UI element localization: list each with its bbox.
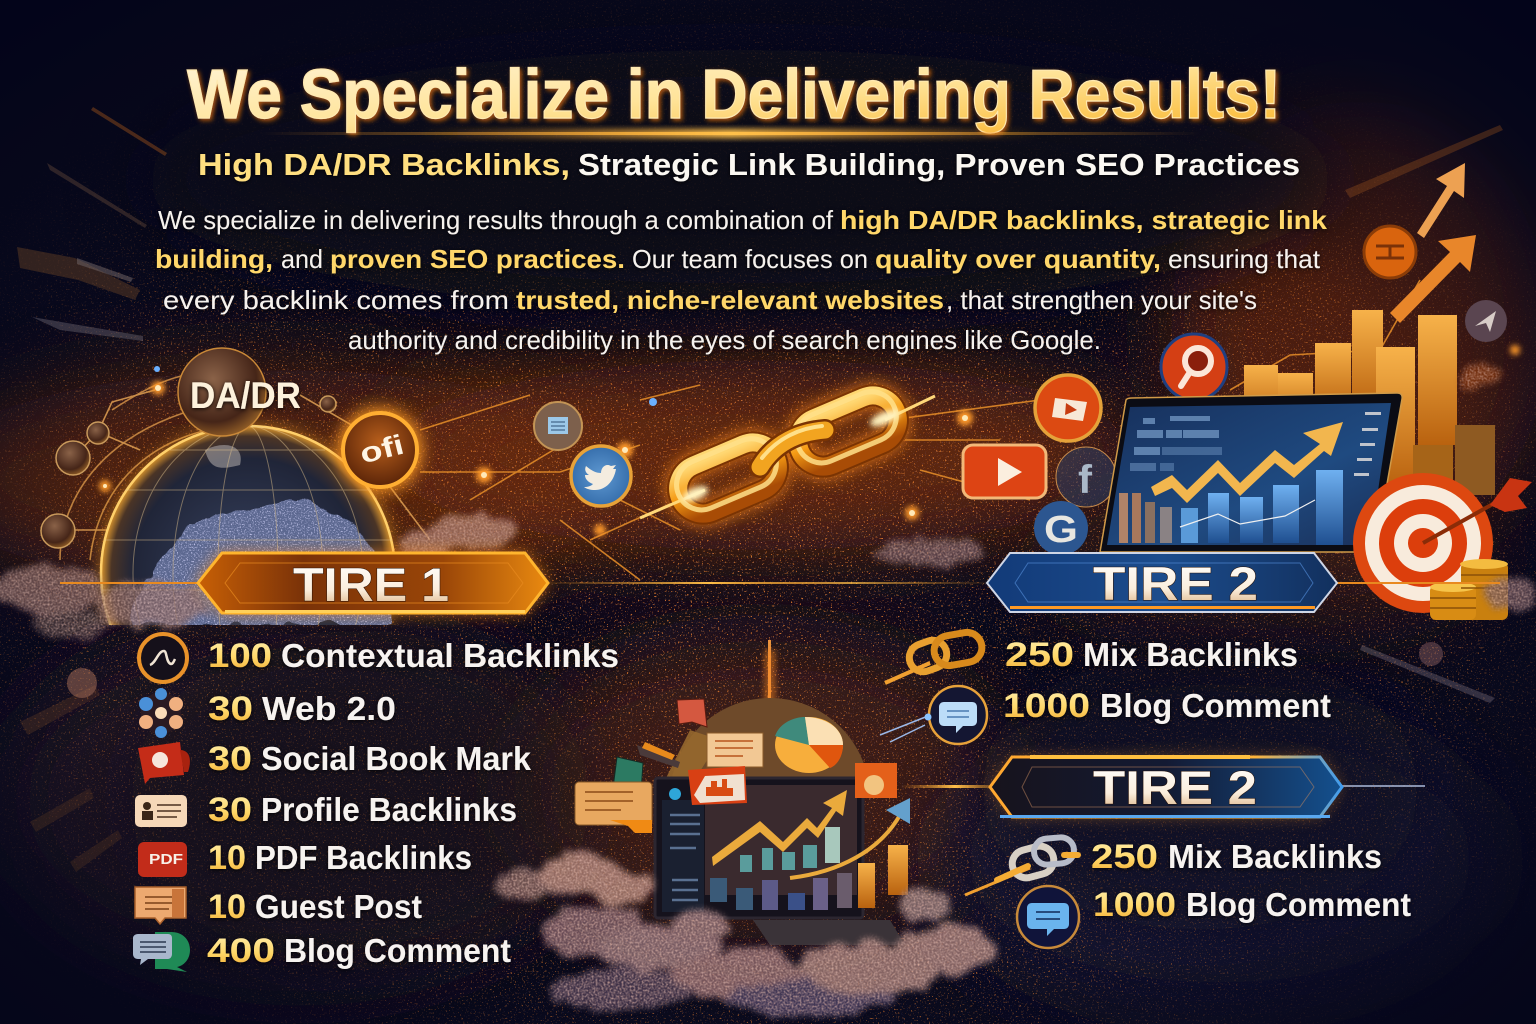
gold rising arrow bbox=[712, 790, 847, 866]
pie chart bbox=[775, 717, 843, 773]
floating doc top bbox=[707, 733, 763, 767]
speech card left bbox=[575, 782, 652, 833]
shards and streaks bbox=[17, 107, 1503, 872]
icon: search badge bbox=[1161, 334, 1227, 400]
description paragraph: trusted, niche-relevant websites bbox=[516, 285, 944, 315]
list: tire 2 lower items: 1000 bbox=[1093, 886, 1176, 924]
list: tire 1 items: Contextual Backlinks bbox=[281, 637, 619, 674]
icon: comment bubbles bbox=[133, 932, 190, 972]
icon: profile card bbox=[135, 795, 187, 827]
subtitle: Strategic Link Building, Proven SEO Practices bbox=[578, 147, 1300, 182]
DA/DR bubble bbox=[178, 348, 301, 436]
subtitle: High DA/DR Backlinks, bbox=[198, 147, 570, 182]
dashboard rising arrow bbox=[1151, 422, 1343, 503]
network lines and sparks bbox=[58, 280, 1420, 580]
list: tire 1 items: 30 bbox=[208, 791, 252, 829]
description paragraph: Our team focuses on bbox=[632, 244, 868, 274]
orange square card bbox=[855, 763, 897, 798]
banner: tire 1: TIRE 1 bbox=[293, 558, 449, 611]
rising arrows with coin badge bbox=[1364, 163, 1507, 342]
icon: facebook bubble bbox=[1056, 447, 1116, 507]
banner: tire 1 bbox=[198, 553, 548, 613]
icon: ofi badge: ofi bbox=[357, 429, 407, 469]
glowing spark nodes bbox=[99, 345, 1520, 632]
banner: tire 2 upper: TIRE 2 bbox=[1093, 557, 1258, 610]
icon: glowing chain bbox=[640, 384, 935, 521]
blue curve arrow bbox=[790, 798, 910, 878]
list: tire 1 items bbox=[207, 637, 619, 970]
laptop screen bbox=[655, 778, 863, 918]
description paragraph: authority and credibility in the eyes of search engines like Google. bbox=[348, 325, 1101, 355]
list: tire 1 items: 30 bbox=[208, 740, 252, 778]
list: tire 2 lower items: Mix Backlinks bbox=[1168, 838, 1382, 875]
list: tire 2 lower items bbox=[1091, 838, 1411, 924]
list: tire 1 items: 30 bbox=[208, 690, 253, 728]
list: tire 1 items: Blog Comment bbox=[284, 932, 511, 969]
icon: comment bubble upper bbox=[880, 686, 987, 744]
title: We Specialize in Delivering Results! bbox=[187, 55, 1281, 133]
green card bbox=[613, 757, 643, 793]
list: tire 1 items: 400 bbox=[207, 932, 275, 970]
clouds behind banners bbox=[0, 363, 1536, 639]
bar chart backdrop bbox=[1244, 310, 1495, 495]
icon: video badge bbox=[1035, 375, 1101, 441]
list: tire 1 items: Web 2.0 bbox=[262, 690, 396, 727]
dashboard text rows bbox=[1130, 416, 1222, 471]
banner rails bbox=[60, 582, 1500, 788]
list: tire 1 items: 100 bbox=[208, 637, 272, 675]
icon: guest post note bbox=[135, 887, 186, 924]
banner: tire 2 lower: TIRE 2 bbox=[1093, 761, 1257, 814]
icon: comment bubble lower bbox=[1017, 886, 1079, 948]
list: tire 1 items: Social Book Mark bbox=[261, 740, 532, 777]
description paragraph bbox=[155, 205, 1328, 355]
icon: bookmark card bbox=[138, 742, 190, 784]
icon: contextual ring bbox=[139, 634, 187, 682]
list: tire 2 upper items: 250 bbox=[1005, 636, 1074, 674]
dashboard laptop scene bbox=[575, 698, 910, 945]
subtitle bbox=[198, 147, 1300, 182]
list: tire 2 upper items: Blog Comment bbox=[1100, 687, 1331, 724]
globe bbox=[89, 416, 402, 625]
dashboard side menu bbox=[1354, 412, 1381, 476]
list: tire 2 upper items: 1000 bbox=[1003, 687, 1090, 725]
icon: web 2.0 hexagons bbox=[139, 688, 183, 738]
list: tire 1 items: Profile Backlinks bbox=[261, 791, 517, 828]
small network bubbles bbox=[41, 396, 336, 548]
keyboard base bbox=[753, 920, 905, 945]
icon: pdf badge: PDF bbox=[149, 851, 183, 868]
red chart card bbox=[688, 766, 747, 805]
banner: tire 2 upper bbox=[987, 553, 1337, 612]
list: tire 1 items: 10 bbox=[208, 839, 246, 877]
list: tire 2 upper items: Mix Backlinks bbox=[1083, 636, 1298, 673]
description paragraph: high DA/DR backlinks, strategic link bbox=[840, 205, 1328, 235]
DA/DR bubble: DA/DR bbox=[190, 375, 301, 416]
list: tire 1 items: 10 bbox=[208, 888, 246, 926]
icon: pdf badge bbox=[138, 842, 187, 877]
teal bars bbox=[740, 827, 840, 872]
banner: tire 2 lower bbox=[990, 755, 1342, 818]
description paragraph: building, bbox=[155, 244, 273, 274]
icon: gold coins bbox=[1430, 559, 1508, 620]
description paragraph: , that strengthen your site's bbox=[946, 285, 1257, 315]
icon: google bubble bbox=[1034, 501, 1088, 555]
description paragraph: We specialize in delivering results through a combination of bbox=[158, 205, 834, 235]
icon: google bubble: G bbox=[1044, 509, 1078, 551]
icon: facebook bubble: f bbox=[1078, 458, 1093, 502]
description paragraph: proven SEO practices. bbox=[330, 244, 625, 274]
list: tire 2 lower items: 250 bbox=[1091, 838, 1158, 876]
central light beam bbox=[764, 640, 776, 780]
icon: ofi badge bbox=[338, 408, 422, 492]
icon: silver chain lower bbox=[965, 836, 1078, 895]
description paragraph: every backlink comes from bbox=[163, 285, 509, 315]
title underline glow bbox=[260, 129, 1200, 138]
list: tire 1 items: Guest Post bbox=[255, 888, 422, 925]
description paragraph: ensuring that bbox=[1168, 244, 1321, 274]
list: tire 2 upper items bbox=[1003, 636, 1331, 725]
tablet dashboard bbox=[1100, 393, 1402, 552]
list: tire 1 items: PDF Backlinks bbox=[255, 839, 472, 876]
icon: gold chain upper bbox=[885, 630, 984, 683]
blue gem bbox=[669, 788, 681, 800]
clouds at bottom centre bbox=[497, 855, 993, 1016]
icon: document bubble bbox=[534, 402, 582, 450]
description paragraph: quality over quantity, bbox=[875, 244, 1161, 274]
list: tire 2 lower items: Blog Comment bbox=[1186, 886, 1411, 923]
red flag card bbox=[677, 699, 707, 727]
icon: twitter bubble bbox=[571, 446, 631, 506]
icon: youtube button bbox=[963, 445, 1046, 498]
icon: target with arrow bbox=[1353, 473, 1532, 613]
dashboard bars bbox=[1119, 470, 1343, 545]
pencil bbox=[637, 742, 680, 768]
description paragraph: and bbox=[281, 244, 323, 274]
lower bars bbox=[710, 845, 908, 910]
